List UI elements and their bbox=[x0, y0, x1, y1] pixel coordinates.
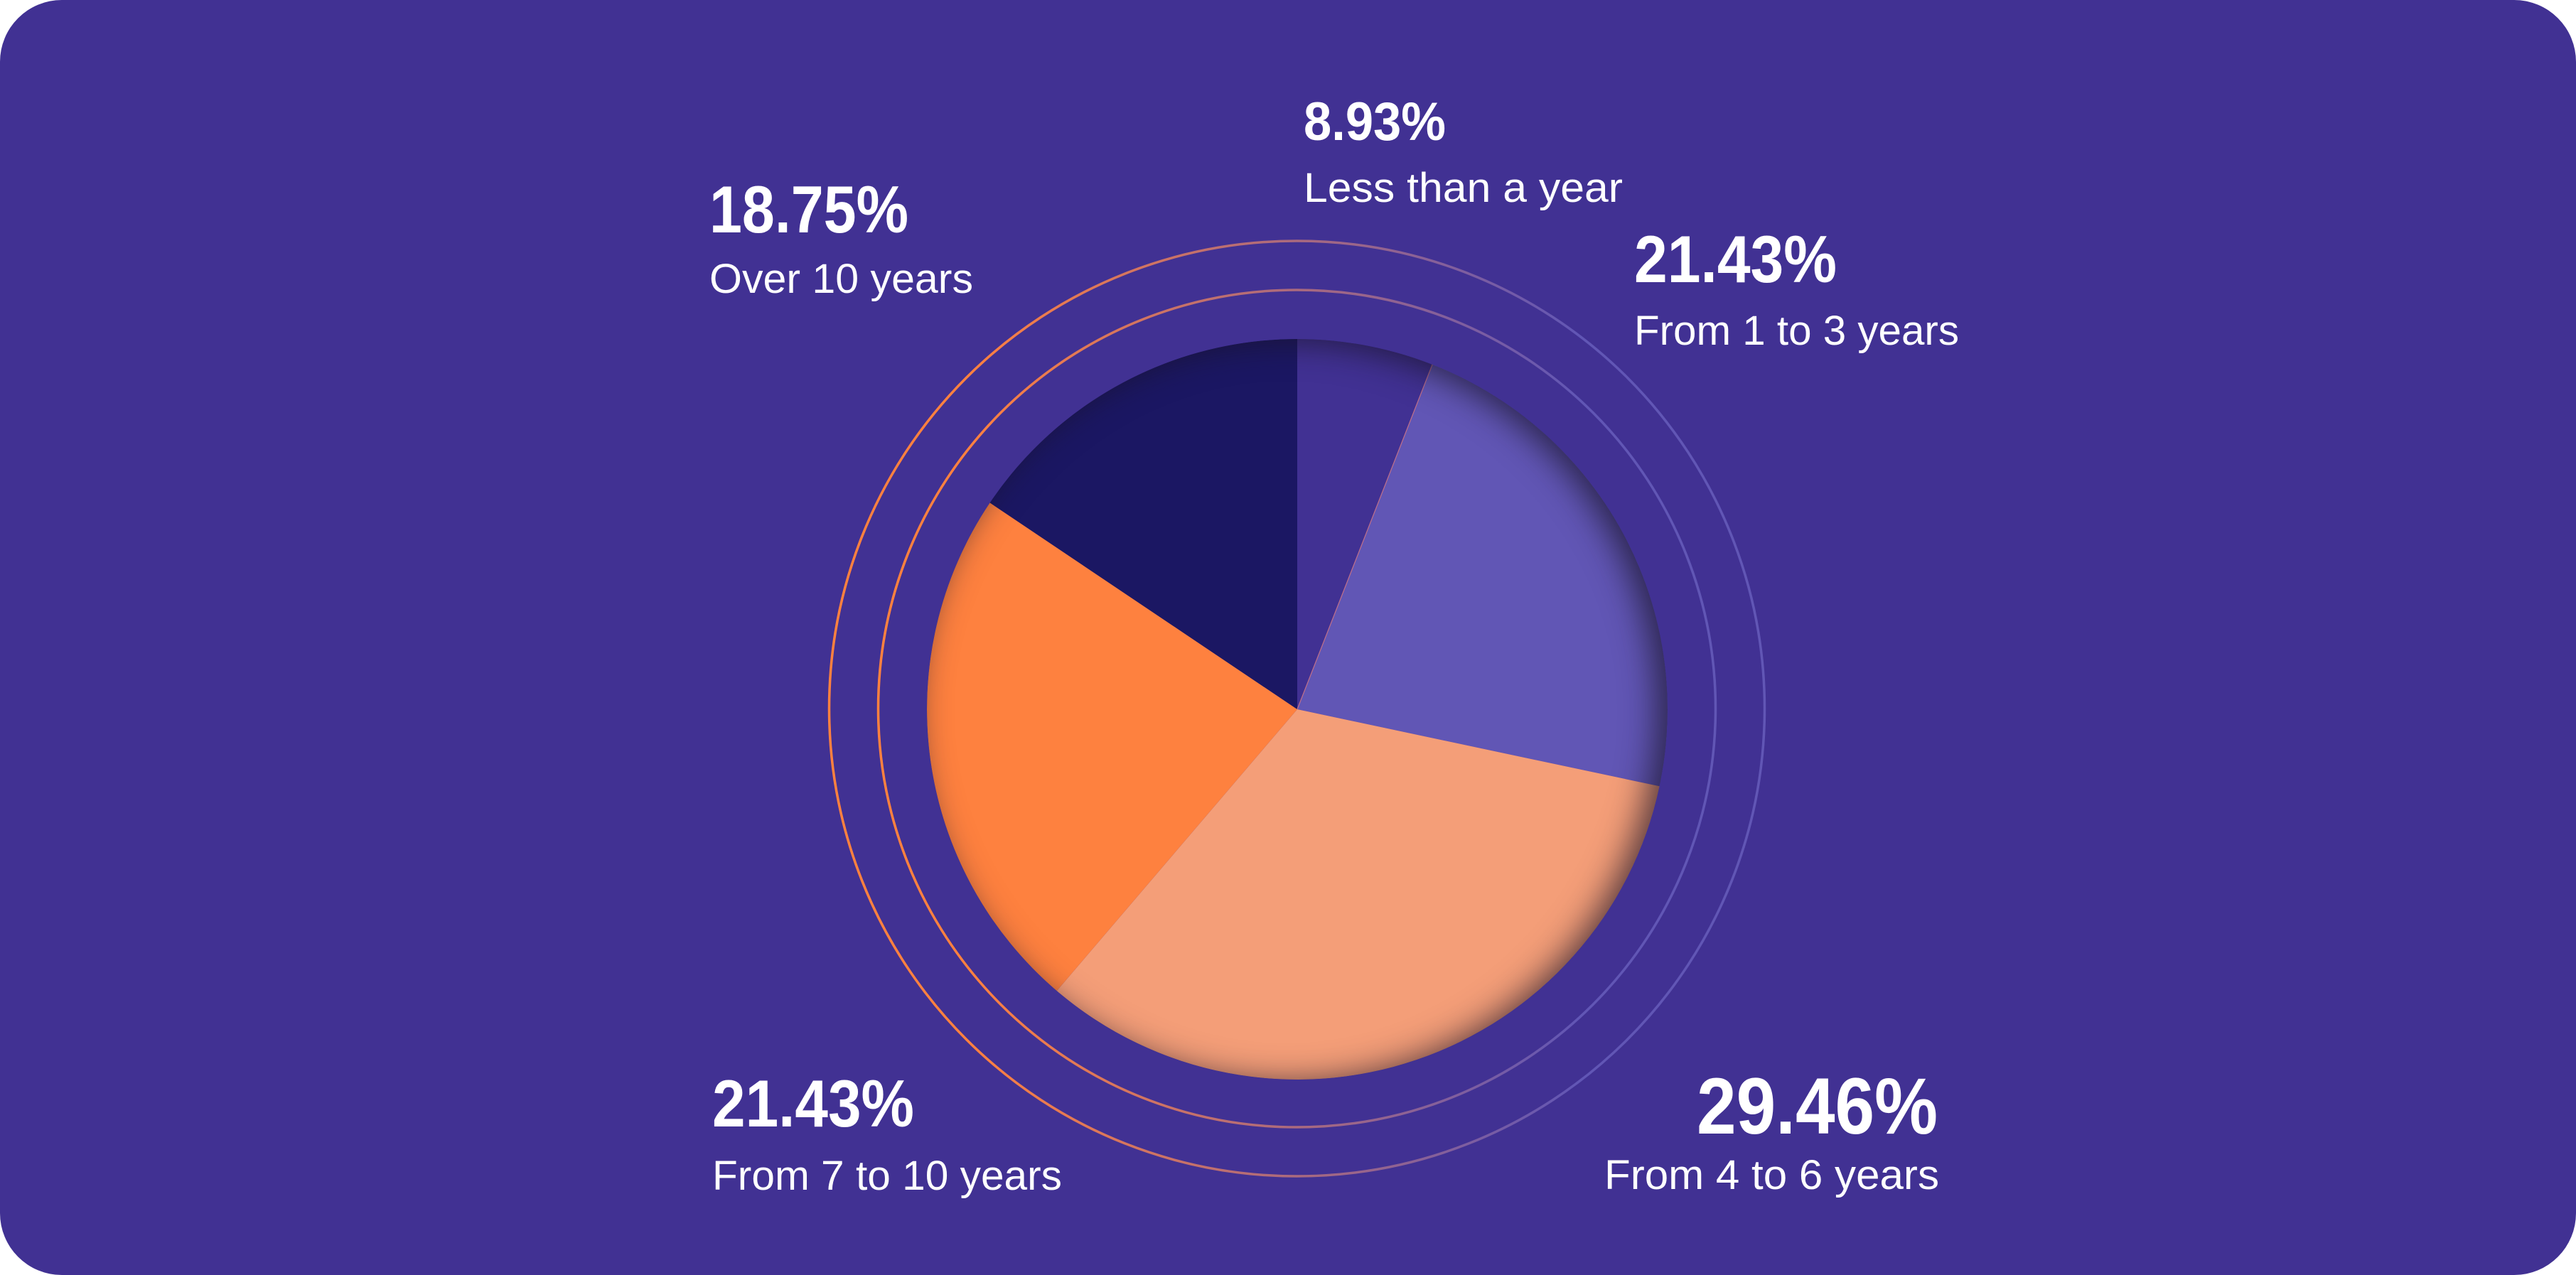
label: over 10 years bbox=[709, 172, 973, 302]
pie inner shadow bbox=[927, 338, 1668, 1079]
label: from 4 to 6 years bbox=[1604, 1062, 1939, 1198]
label: from 7 to 10 years: From 7 to 10 years bbox=[712, 1153, 1062, 1199]
pie chart bbox=[927, 339, 1668, 1080]
label: from 4 to 6 years: From 4 to 6 years bbox=[1604, 1152, 1939, 1198]
slice boundary line bbox=[1297, 364, 1432, 709]
slice: less than a year bbox=[1297, 338, 1432, 709]
label: less than a year bbox=[1304, 92, 1623, 211]
label: from 7 to 10 years: 21.43% bbox=[712, 1066, 914, 1141]
label: over 10 years: Over 10 years bbox=[709, 256, 973, 302]
label: from 1 to 3 years: 21.43% bbox=[1634, 222, 1837, 296]
slice: over 10 years bbox=[989, 338, 1297, 709]
slice: from 1 to 3 years bbox=[1297, 364, 1667, 786]
slice: from 4 to 6 years bbox=[1056, 709, 1659, 1079]
label: over 10 years: 18.75% bbox=[709, 172, 908, 247]
label: from 1 to 3 years bbox=[1634, 222, 1959, 354]
slice: from 7 to 10 years bbox=[927, 502, 1297, 991]
label: less than a year: 8.93% bbox=[1304, 92, 1446, 152]
label: from 7 to 10 years bbox=[712, 1066, 1062, 1199]
label: from 1 to 3 years: From 1 to 3 years bbox=[1634, 308, 1959, 354]
label: less than a year: Less than a year bbox=[1304, 165, 1623, 211]
label: from 4 to 6 years: 29.46% bbox=[1697, 1062, 1938, 1151]
